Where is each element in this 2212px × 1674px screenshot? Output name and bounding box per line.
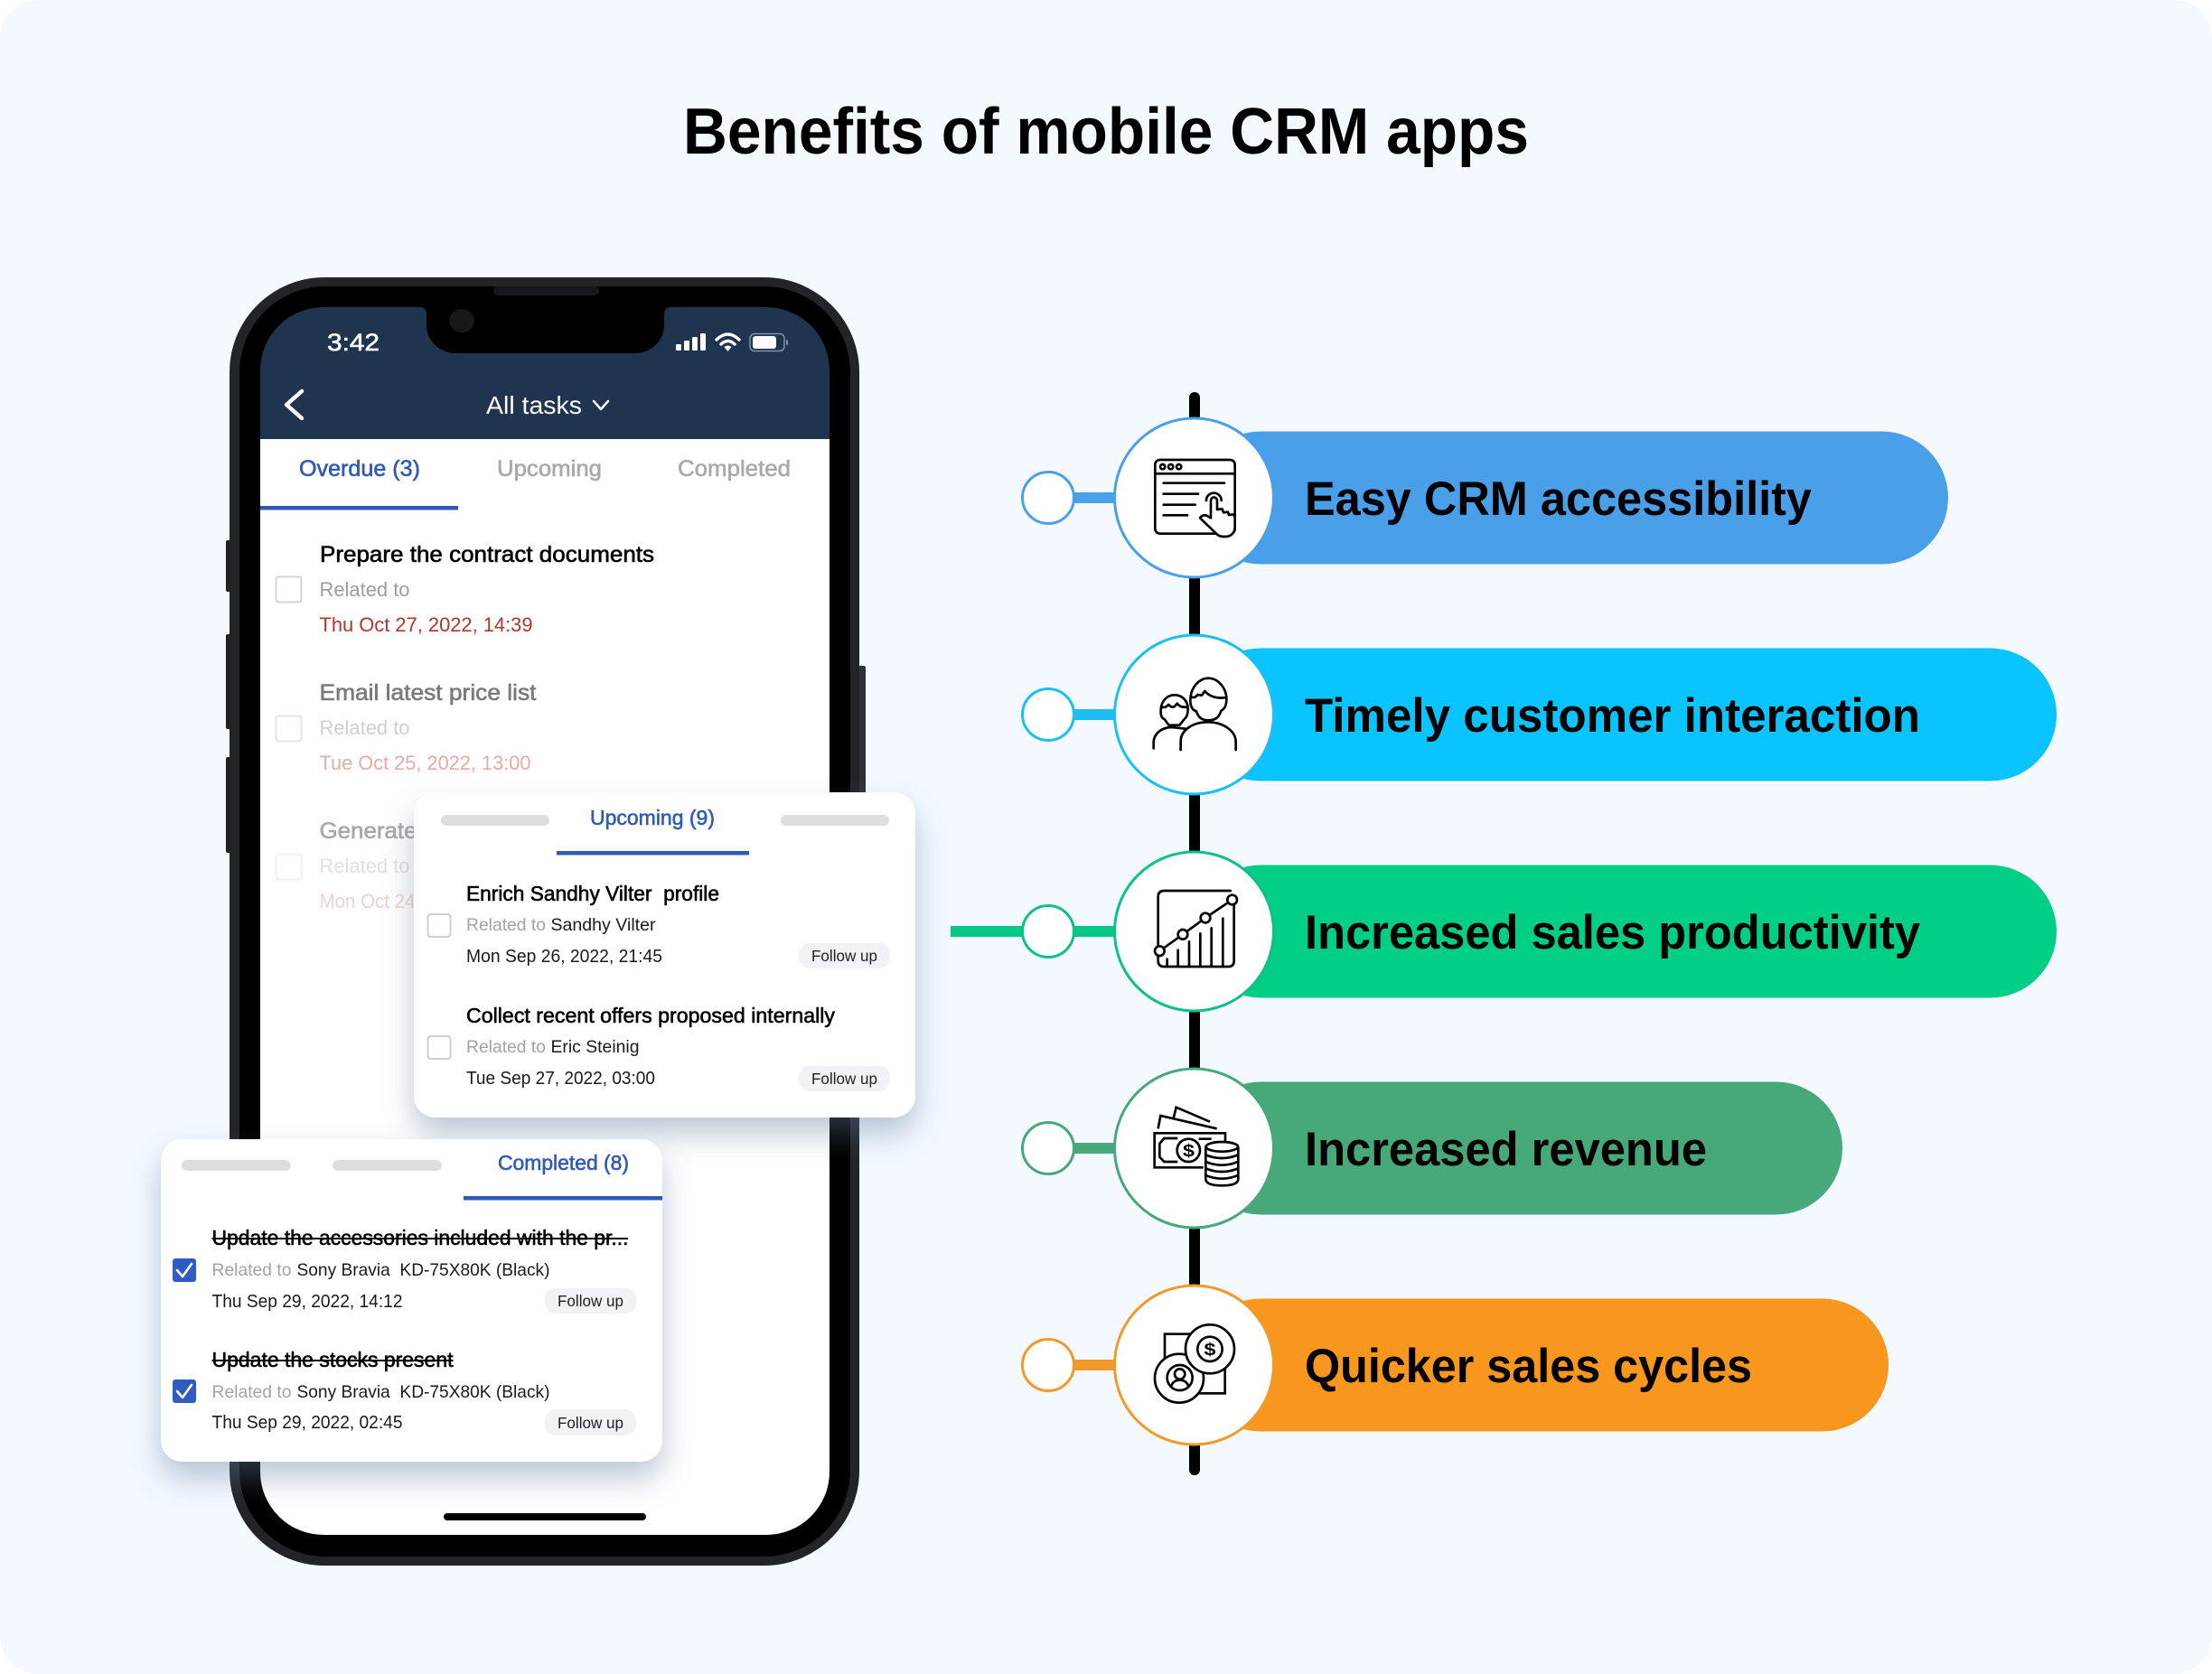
connector (951, 905, 1125, 958)
task: update stocks: Sony Bravia KD-75X80K (Black) (296, 1382, 549, 1402)
phone body (230, 277, 859, 1566)
label: Increased sales productivity (1305, 906, 1920, 959)
label: Quicker sales cycles (1305, 1340, 1752, 1393)
bar (1195, 865, 2057, 997)
panel: completed tasks card (161, 1139, 662, 1462)
task: enrich profile (428, 882, 890, 968)
icon: browser with tapping hand (1155, 460, 1235, 537)
task: enrich profile: Mon Sep 26, 2022, 21:45 (466, 947, 662, 967)
task: enrich profile: Follow up (811, 947, 877, 965)
task: prepare the contract documents: Thu Oct 27, 2022, 14:39 (320, 613, 533, 636)
active tab: Completed (8) (498, 1151, 629, 1174)
task: generate, partly hidden: Mon Oct 24 (320, 890, 416, 912)
icon: chevron (594, 401, 608, 409)
tabs: Upcoming (497, 456, 602, 482)
task: prepare the contract documents (276, 542, 654, 636)
icon: back arrow (286, 391, 302, 418)
status bar time: 3:42 (327, 329, 380, 356)
task: prepare the contract documents: Prepare the contract documents (320, 542, 654, 567)
icon: two people (1154, 678, 1236, 750)
title: Benefits of mobile CRM apps (683, 96, 1529, 168)
task: update accessories: Update the accessories included with the pr... (211, 1226, 629, 1249)
connector (1023, 1339, 1125, 1391)
label: Increased revenue (1305, 1123, 1707, 1176)
node circle (1115, 852, 1274, 1011)
task: update stocks (173, 1348, 636, 1436)
tabs: Overdue (3) (299, 456, 420, 482)
benefit: increased sales productivity (951, 852, 2057, 1011)
label: Easy CRM accessibility (1305, 472, 1812, 526)
icon: banknotes and coins (1155, 1108, 1238, 1185)
icon: signal (676, 333, 706, 351)
node circle (1115, 1286, 1274, 1445)
dollar sign: $ (1204, 1341, 1216, 1360)
task: collect offers: Eric Steinig (551, 1037, 640, 1057)
task: update accessories: Related to (211, 1260, 292, 1280)
active tab (464, 1151, 662, 1200)
task: update stocks: Thu Sep 29, 2022, 02:45 (211, 1413, 403, 1433)
task: enrich profile: Sandhy Vilter (551, 915, 656, 935)
node circle (1115, 418, 1274, 577)
task: collect offers: Follow up (811, 1070, 877, 1088)
task: generate, partly hidden (276, 818, 417, 912)
phone screen (260, 439, 830, 1535)
placeholder tabs (182, 1160, 442, 1171)
benefit: increased revenue (1023, 1069, 1842, 1228)
connector (1023, 472, 1125, 524)
home indicator (444, 1513, 646, 1520)
task: update accessories (173, 1226, 636, 1314)
icon: growth chart (1155, 891, 1237, 967)
task: generate, partly hidden: Generate (320, 818, 417, 844)
bar (1195, 649, 2057, 781)
placeholder tabs (441, 815, 889, 826)
task: email latest price list: Related to (320, 716, 410, 739)
tabs (260, 456, 791, 510)
phone side buttons (226, 540, 866, 937)
dollar sign: $ (1183, 1142, 1195, 1161)
task: update accessories: Sony Bravia KD-75X80K (Black) (296, 1260, 549, 1280)
tabs: Completed (678, 456, 791, 482)
node circle (1115, 1069, 1274, 1228)
task: enrich profile: Enrich Sandhy Vilter profile (466, 882, 719, 905)
header label: All tasks (486, 391, 582, 419)
icon: coins and customer (1155, 1324, 1234, 1403)
task: email latest price list: Email latest price list (320, 680, 537, 706)
icon: battery (750, 334, 788, 351)
task: collect offers (428, 1004, 890, 1091)
label: Timely customer interaction (1305, 689, 1920, 743)
task: collect offers: Related to (466, 1037, 546, 1057)
task: prepare the contract documents: Related to (320, 578, 410, 601)
bar (1195, 1299, 1889, 1431)
task: email latest price list (276, 680, 537, 774)
camera (449, 309, 474, 332)
task: update accessories: Thu Sep 29, 2022, 14:12 (211, 1292, 403, 1312)
app header (260, 307, 830, 439)
benefit: easy CRM accessibility (1023, 418, 1948, 577)
task: collect offers: Collect recent offers proposed internally (466, 1004, 835, 1027)
bar (1195, 432, 1948, 564)
task: enrich profile: Related to (466, 915, 546, 935)
connector (1023, 688, 1125, 741)
active tab: Upcoming (9) (590, 806, 715, 829)
bar (1195, 1082, 1842, 1214)
phone mockup (226, 277, 866, 1566)
task: generate, partly hidden: Related to (320, 855, 410, 877)
timeline spine (1189, 392, 1200, 1475)
panel: upcoming tasks card (414, 792, 915, 1118)
task: update stocks: Follow up (558, 1414, 623, 1432)
icon: wifi (717, 334, 739, 351)
task: collect offers: Tue Sep 27, 2022, 03:00 (466, 1069, 655, 1089)
task: update stocks: Update the stocks present (211, 1348, 454, 1371)
task: update accessories: Follow up (558, 1292, 623, 1310)
node circle (1115, 635, 1274, 794)
benefit: timely customer interaction (1023, 635, 2057, 794)
task: email latest price list: Tue Oct 25, 2022, 13:00 (320, 752, 531, 774)
connector (1023, 1122, 1125, 1174)
task: update stocks: Related to (211, 1382, 292, 1402)
benefit: quicker sales cycles (1023, 1286, 1889, 1445)
active tab (557, 806, 749, 855)
